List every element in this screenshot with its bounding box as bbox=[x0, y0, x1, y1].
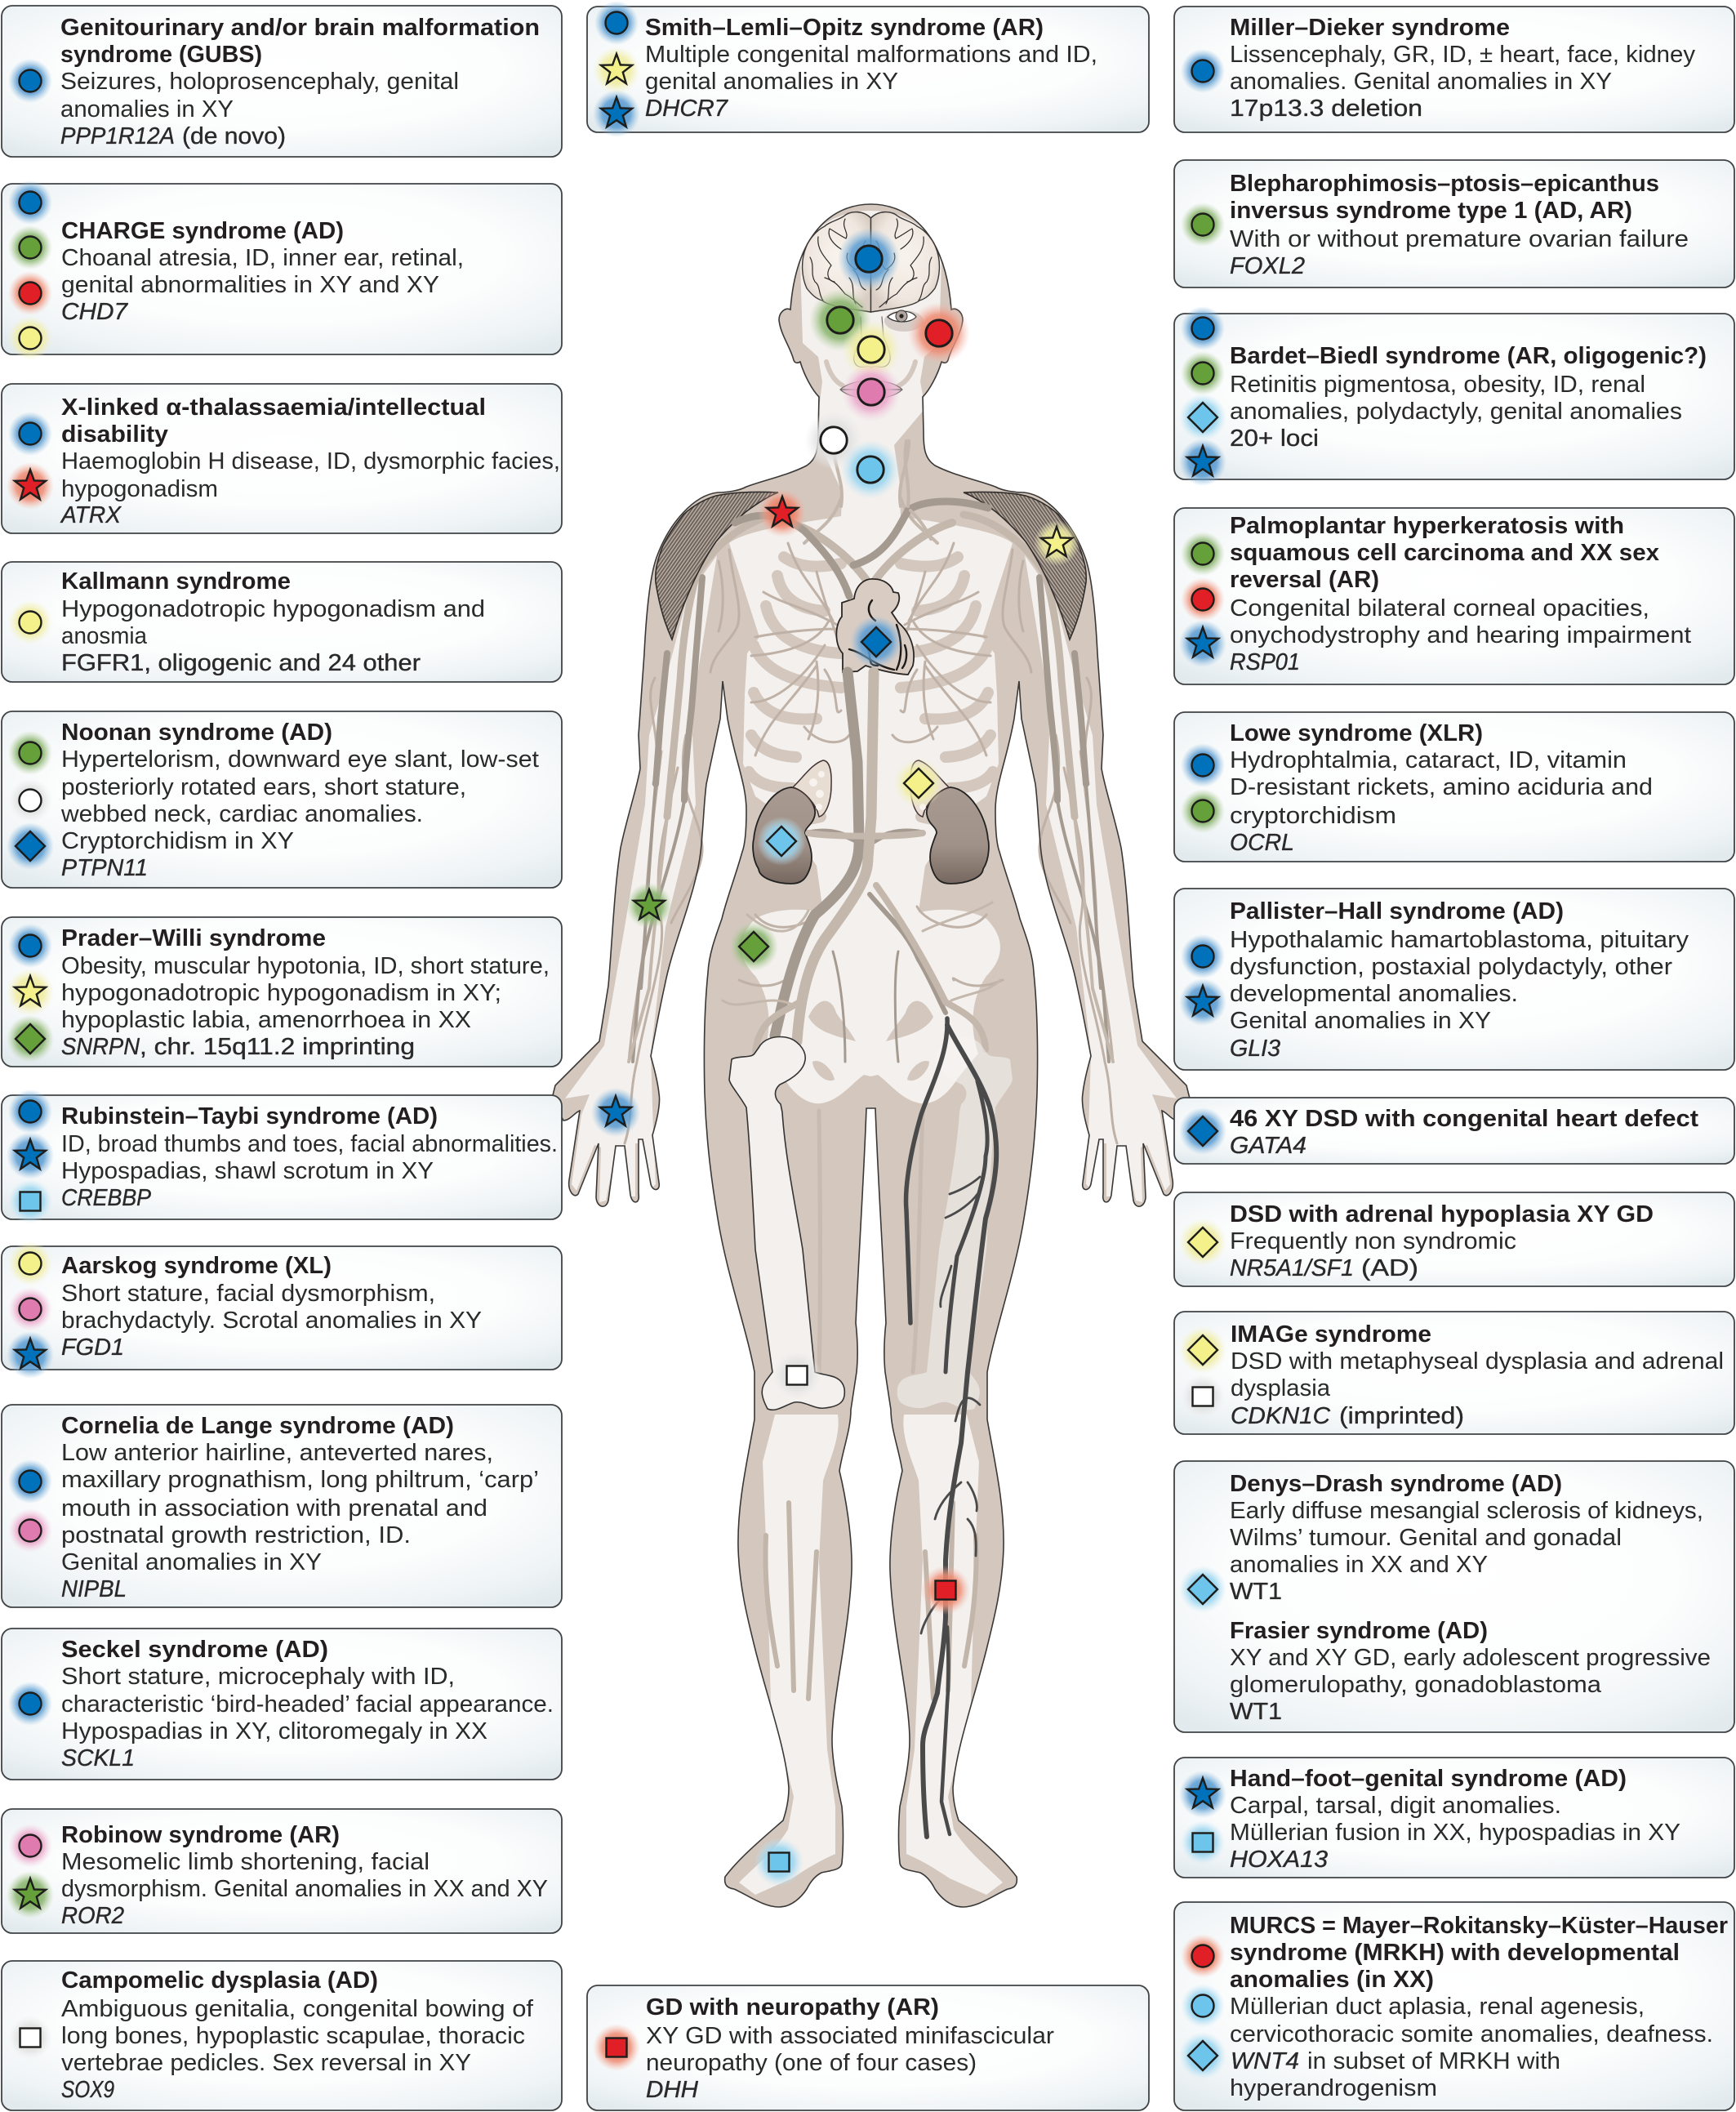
aorta and vena cava with iliac branches bbox=[723, 441, 1000, 1372]
icon: green circle bbox=[1181, 789, 1225, 833]
nose and mouth lines bbox=[840, 317, 902, 399]
icon: red circle bbox=[1181, 577, 1225, 622]
text block: 17p13.3 deletion bbox=[1230, 96, 1422, 122]
text block: Prader–Willi syndrome bbox=[61, 925, 326, 951]
right femur, translucent bbox=[897, 1037, 1013, 1410]
panel: IMAGe bbox=[1174, 1312, 1734, 1434]
panel: Blepharophimosis bbox=[1174, 160, 1734, 287]
body outline bbox=[552, 204, 1190, 1907]
text block: Noonan syndrome (AD) bbox=[61, 720, 332, 746]
text block: syndrome (GUBS) bbox=[60, 42, 262, 68]
icon: light blue diamond bbox=[1179, 394, 1226, 441]
text block: WT1 bbox=[1230, 1699, 1282, 1725]
icon: red star bbox=[7, 462, 54, 510]
icon: green diamond bbox=[7, 1015, 54, 1063]
icon: blue star bbox=[1179, 978, 1226, 1026]
text block: onychodystrophy and hearing impairment bbox=[1230, 622, 1691, 648]
marker: brain blue circle bbox=[838, 228, 900, 290]
text block: posteriorly rotated ears, short stature, bbox=[61, 774, 466, 800]
icon: blue circle bbox=[8, 412, 52, 456]
text block bbox=[61, 1253, 482, 1361]
panel box bbox=[1174, 1312, 1734, 1434]
text block: Lowe syndrome (XLR) bbox=[1230, 720, 1483, 746]
text block bbox=[1230, 171, 1689, 279]
text block: Mesomelic limb shortening, facial bbox=[61, 1849, 430, 1875]
text block: Hypertelorism, downward eye slant, low-set bbox=[61, 746, 539, 773]
text block: , chr. 15q11.2 imprinting bbox=[140, 1034, 415, 1060]
text block bbox=[61, 1103, 558, 1211]
text block bbox=[645, 15, 1097, 122]
panel: ATRX bbox=[2, 384, 562, 533]
text block: postnatal growth restriction, ID. bbox=[61, 1522, 411, 1548]
panel box bbox=[1174, 1192, 1734, 1286]
text block: disability bbox=[61, 421, 168, 448]
panel box bbox=[587, 7, 1149, 132]
text block bbox=[61, 1637, 554, 1771]
text block bbox=[60, 15, 540, 149]
icon: green circle bbox=[1181, 203, 1225, 247]
text block: OCRL bbox=[1230, 830, 1294, 856]
text block: Cryptorchidism in XY bbox=[61, 828, 294, 854]
text block bbox=[1230, 720, 1653, 856]
panel: Bardet-Biedl bbox=[1174, 306, 1734, 486]
text block: Hypospadias, shawl scrotum in XY bbox=[61, 1158, 434, 1184]
icon: blue star bbox=[7, 1132, 54, 1179]
marker: adrenal yellow diamond bbox=[894, 759, 943, 808]
text block: Genital anomalies in XY bbox=[61, 1549, 322, 1575]
text block: anomalies. Genital anomalies in XY bbox=[1230, 69, 1612, 95]
text block: DHH bbox=[646, 2077, 698, 2103]
icon: green circle bbox=[1181, 532, 1225, 576]
icon: blue circle bbox=[1181, 934, 1225, 978]
text block: neuropathy (one of four cases) bbox=[646, 2050, 977, 2076]
panel box bbox=[587, 1985, 1149, 2110]
panel: Robinow bbox=[2, 1809, 562, 1933]
text block: glomerulopathy, gonadoblastoma bbox=[1230, 1672, 1601, 1698]
text block: CHD7 bbox=[61, 299, 128, 325]
panel box bbox=[2, 562, 562, 682]
panel: GD with neuropathy bbox=[587, 1985, 1149, 2110]
text block: CREBBP bbox=[61, 1185, 151, 1211]
text block: Carpal, tarsal, digit anomalies. bbox=[1230, 1793, 1561, 1819]
text block: brachydactyly. Scrotal anomalies in XY bbox=[61, 1308, 482, 1334]
panel box bbox=[2, 1629, 562, 1780]
panel: Hand-foot-genital bbox=[1174, 1758, 1734, 1878]
text block: Choanal atresia, ID, inner ear, retinal, bbox=[61, 245, 464, 271]
text block: (imprinted) bbox=[1339, 1403, 1464, 1429]
panel box bbox=[2, 1095, 562, 1219]
panel: Rubinstein-Taybi bbox=[2, 1089, 562, 1223]
panel box bbox=[2, 6, 562, 157]
text block: ID, broad thumbs and toes, facial abnormalities. bbox=[61, 1131, 558, 1157]
text block: X-linked α-thalassaemia/intellectual bbox=[61, 394, 486, 421]
panel box bbox=[2, 1961, 562, 2110]
text block: SCKL1 bbox=[61, 1745, 135, 1771]
marker: nose yellow circle bbox=[842, 320, 901, 379]
text block: Kallmann syndrome bbox=[61, 568, 291, 595]
text block: mouth in association with prenatal and bbox=[61, 1495, 487, 1522]
icon: red square bbox=[593, 2024, 640, 2071]
text block: inversus syndrome type 1 (AD, AR) bbox=[1230, 198, 1632, 224]
text block bbox=[1230, 1471, 1711, 1725]
panel box bbox=[1174, 1902, 1734, 2110]
icon: yellow circle bbox=[8, 600, 52, 644]
panel box bbox=[1174, 314, 1734, 479]
text block: MURCS = Mayer–Rokitansky–Küster–Hauser bbox=[1230, 1913, 1728, 1939]
marker: hip green diamond bbox=[729, 922, 778, 971]
marker: forearm green star bbox=[626, 883, 672, 929]
text block bbox=[1230, 1913, 1728, 2101]
text block: HOXA13 bbox=[1230, 1847, 1328, 1873]
marker: shoulder yellow star bbox=[1034, 520, 1079, 566]
marker: knee white square bbox=[772, 1351, 821, 1400]
icon: red circle bbox=[8, 271, 52, 315]
text block: squamous cell carcinoma and XX sex bbox=[1230, 540, 1659, 566]
icon: blue circle bbox=[1181, 49, 1225, 93]
panel: GUBS bbox=[2, 6, 562, 157]
text block bbox=[1230, 15, 1696, 122]
text block: hyperandrogenism bbox=[1230, 2075, 1437, 2101]
text block: cryptorchidism bbox=[1230, 803, 1396, 829]
text block: PPP1R12A bbox=[60, 123, 175, 149]
icon: white square bbox=[1181, 1375, 1225, 1419]
panel: DSD with adrenal hypoplasia bbox=[1174, 1192, 1734, 1286]
icon: red circle bbox=[1181, 1934, 1225, 1978]
text block bbox=[61, 1413, 539, 1602]
text block: CHARGE syndrome (AD) bbox=[61, 218, 344, 244]
text block: hypogonadism bbox=[61, 476, 218, 502]
text block: characteristic ‘bird-headed’ facial appearance. bbox=[61, 1691, 554, 1718]
text block: Ambiguous genitalia, congenital bowing of bbox=[61, 1996, 533, 2022]
text block bbox=[60, 720, 539, 881]
sciatic nerve on right leg bbox=[906, 1018, 996, 1837]
marker: shin red square bbox=[921, 1566, 970, 1615]
text block: Aarskog syndrome (XL) bbox=[61, 1253, 332, 1279]
panel box bbox=[2, 1405, 562, 1607]
text block: Hypothalamic hamartoblastoma, pituitary bbox=[1230, 927, 1689, 953]
text block: dysfunction, postaxial polydactyly, other bbox=[1230, 954, 1673, 980]
icon: yellow diamond bbox=[1179, 1219, 1226, 1266]
panel: 46 XY DSD bbox=[1174, 1098, 1734, 1164]
text block: Obesity, muscular hypotonia, ID, short stature, bbox=[61, 953, 550, 979]
text block: developmental anomalies. bbox=[1230, 981, 1518, 1007]
text block bbox=[60, 394, 560, 528]
text block: Frequently non syndromic bbox=[1230, 1228, 1516, 1254]
icon: blue star bbox=[1179, 439, 1226, 486]
icon: white square bbox=[8, 2016, 52, 2060]
icon: green circle bbox=[8, 731, 52, 775]
panel: Aarskog bbox=[2, 1241, 562, 1379]
icon: blue circle bbox=[1181, 306, 1225, 350]
text block: Hand–foot–genital syndrome (AD) bbox=[1230, 1766, 1627, 1792]
text block: Congenital bilateral corneal opacities, bbox=[1230, 595, 1649, 622]
text block: Smith–Lemli–Opitz syndrome (AR) bbox=[645, 15, 1044, 41]
text block: Multiple congenital malformations and ID, bbox=[645, 42, 1097, 68]
text block: webbed neck, cardiac anomalies. bbox=[60, 801, 423, 827]
text block: Frasier syndrome (AD) bbox=[1230, 1618, 1488, 1644]
icon: yellow circle bbox=[8, 316, 52, 360]
icon: blue circle bbox=[1181, 743, 1225, 787]
text block: FGD1 bbox=[61, 1334, 124, 1361]
text block: anosmia bbox=[61, 623, 147, 649]
text block: 20+ loci bbox=[1230, 426, 1319, 452]
panel: Pallister-Hall bbox=[1174, 889, 1734, 1070]
text block: GD with neuropathy (AR) bbox=[646, 1994, 939, 2021]
icon: yellow circle bbox=[8, 1241, 52, 1285]
body markers bbox=[591, 228, 1079, 1887]
text block: WNT4 bbox=[1231, 2048, 1299, 2074]
text block: anomalies in XX and XY bbox=[1230, 1552, 1488, 1578]
panel box bbox=[2, 1246, 562, 1370]
text block: Seckel syndrome (AD) bbox=[61, 1637, 328, 1663]
text block bbox=[1230, 1201, 1654, 1281]
text block bbox=[1230, 1766, 1680, 1873]
panel: Noonan bbox=[2, 711, 562, 888]
icon: yellow diamond bbox=[1179, 1326, 1226, 1374]
icon: white circle bbox=[8, 778, 52, 822]
anatomical human figure bbox=[552, 204, 1190, 1907]
icon: pink circle bbox=[8, 1508, 52, 1553]
text block: NIPBL bbox=[61, 1576, 127, 1602]
text block bbox=[61, 568, 485, 676]
marker: shoulder red star bbox=[758, 488, 807, 537]
panel: Seckel bbox=[2, 1629, 562, 1780]
text block: Haemoglobin H disease, ID, dysmorphic facies, bbox=[61, 448, 560, 475]
text block: DHCR7 bbox=[645, 96, 728, 122]
text block: Retinitis pigmentosa, obesity, ID, renal bbox=[1230, 372, 1645, 398]
text block: FOXL2 bbox=[1230, 253, 1305, 279]
text block: Lissencephaly, GR, ID, ± heart, face, kidney bbox=[1230, 42, 1696, 68]
marker: kidney light blue diamond bbox=[757, 817, 806, 866]
text block: SNRPN bbox=[61, 1034, 140, 1060]
text block bbox=[1231, 1321, 1724, 1429]
panel: Cornelia de Lange bbox=[2, 1405, 562, 1607]
text block: genital anomalies in XY bbox=[645, 69, 898, 95]
icon: light blue circle bbox=[1181, 1984, 1225, 2028]
text block: dysplasia bbox=[1231, 1375, 1330, 1401]
panel box bbox=[1174, 1461, 1734, 1732]
panel box bbox=[1174, 508, 1734, 684]
text block: WT1 bbox=[1230, 1579, 1282, 1605]
text block: Short stature, facial dysmorphism, bbox=[61, 1281, 435, 1307]
text block: anomalies (in XX) bbox=[1230, 1967, 1434, 1993]
icon: light blue diamond bbox=[1179, 2032, 1226, 2079]
icon: blue star bbox=[7, 1331, 54, 1379]
marker: hand blue star bbox=[591, 1088, 640, 1137]
text block: With or without premature ovarian failure bbox=[1230, 226, 1689, 252]
text block bbox=[1230, 1106, 1699, 1159]
text block: Seizures, holoprosencephaly, genital bbox=[60, 69, 459, 95]
text block: Pallister–Hall syndrome (AD) bbox=[1230, 898, 1564, 925]
text block: Early diffuse mesangial sclerosis of kidneys, bbox=[1230, 1498, 1703, 1524]
text block: FGFR1, oligogenic and 24 other bbox=[61, 650, 421, 676]
text block bbox=[1230, 898, 1689, 1062]
marker: mouth pink circle bbox=[842, 363, 901, 421]
text block: genital abnormalities in XY and XY bbox=[61, 272, 439, 298]
icon: blue diamond bbox=[7, 822, 54, 870]
text block: Müllerian duct aplasia, renal agenesis, bbox=[1230, 1994, 1645, 2020]
panel box bbox=[1174, 889, 1734, 1070]
icon: pink circle bbox=[8, 1287, 52, 1331]
text block: XY and XY GD, early adolescent progressive bbox=[1230, 1645, 1711, 1671]
icon: blue star bbox=[593, 90, 640, 137]
text block bbox=[61, 1822, 548, 1929]
text block: DSD with adrenal hypoplasia XY GD bbox=[1230, 1201, 1654, 1228]
right eye bbox=[884, 310, 924, 332]
marker: heart blue diamond bbox=[850, 616, 902, 668]
text block: Hypogonadotropic hypogonadism and bbox=[61, 596, 485, 622]
text block: 46 XY DSD with congenital heart defect bbox=[1230, 1106, 1699, 1132]
panel: Prader-Willi bbox=[2, 917, 562, 1067]
text block: Wilms’ tumour. Genital and gonadal bbox=[1230, 1525, 1622, 1551]
text block: GLI3 bbox=[1230, 1036, 1280, 1062]
panel: Kallmann bbox=[2, 562, 562, 682]
text block: anomalies, polydactyly, genital anomalies bbox=[1230, 399, 1682, 425]
text block: Short stature, microcephaly with ID, bbox=[61, 1664, 455, 1690]
text block: D-resistant rickets, amino aciduria and bbox=[1230, 774, 1653, 800]
text block: Denys–Drash syndrome (AD) bbox=[1230, 1471, 1562, 1497]
icon: blue circle bbox=[8, 1459, 52, 1504]
left femur bone bbox=[729, 1037, 844, 1410]
panel: Lowe bbox=[1174, 712, 1734, 862]
text block: Palmoplantar hyperkeratosis with bbox=[1230, 513, 1624, 539]
icon: light blue square bbox=[8, 1179, 52, 1223]
icon: blue star bbox=[1179, 620, 1226, 667]
text block: vertebrae pedicles. Sex reversal in XY bbox=[61, 2050, 471, 2076]
text block: hypogonadotropic hypogonadism in XY; bbox=[61, 980, 501, 1006]
face and neck light area bbox=[800, 211, 941, 490]
text block: SOX9 bbox=[61, 2077, 114, 2103]
icon: pink circle bbox=[8, 1824, 52, 1868]
text block: Hydrophtalmia, cataract, ID, vitamin bbox=[1230, 747, 1627, 773]
panel box bbox=[2, 917, 562, 1067]
text block: hypoplastic labia, amenorrhoea in XX bbox=[61, 1007, 471, 1033]
panel: Denys-Drash and Frasier bbox=[1174, 1461, 1734, 1732]
panel box bbox=[1174, 1758, 1734, 1878]
text block: Hypospadias in XY, clitoromegaly in XX bbox=[61, 1718, 487, 1744]
text block: Low anterior hairline, anteverted nares, bbox=[61, 1440, 493, 1466]
icon: blue circle bbox=[594, 1, 639, 45]
panel box bbox=[1174, 160, 1734, 287]
text block: IMAGe syndrome bbox=[1231, 1321, 1431, 1348]
icon: blue circle bbox=[8, 180, 52, 225]
panel box bbox=[2, 384, 562, 533]
marker: foot light blue square bbox=[754, 1838, 803, 1887]
text block: ROR2 bbox=[61, 1903, 124, 1929]
text block: anomalies in XY bbox=[60, 96, 234, 123]
panel box bbox=[2, 711, 562, 888]
text block: CDKN1C bbox=[1231, 1403, 1330, 1429]
brain bbox=[803, 212, 939, 312]
text block: (AD) bbox=[1361, 1255, 1418, 1281]
text block: ATRX bbox=[60, 502, 122, 528]
text block: DSD with metaphyseal dysplasia and adrenal bbox=[1231, 1348, 1724, 1375]
body silhouette fill bbox=[552, 204, 1190, 1907]
icon: blue circle bbox=[8, 924, 52, 968]
icon: light blue diamond bbox=[1179, 1566, 1226, 1613]
text block: (de novo) bbox=[182, 123, 286, 149]
marker: neck white circle bbox=[804, 411, 863, 470]
panel: CHARGE bbox=[2, 180, 562, 360]
text block bbox=[61, 1967, 533, 2103]
text block: PTPN11 bbox=[61, 855, 148, 881]
icon: yellow star bbox=[593, 47, 640, 94]
icon: blue circle bbox=[8, 1682, 52, 1726]
text block: Campomelic dysplasia (AD) bbox=[61, 1967, 378, 1994]
text block bbox=[1230, 343, 1707, 452]
panel box bbox=[2, 184, 562, 354]
text block: NR5A1/SF1 bbox=[1230, 1255, 1354, 1281]
text block: in subset of MRKH with bbox=[1307, 2048, 1560, 2074]
icon: blue star bbox=[1179, 1771, 1226, 1818]
panel: MURCS bbox=[1174, 1902, 1734, 2110]
skeleton, vessels and organs bbox=[565, 362, 1177, 1895]
text block bbox=[61, 925, 550, 1060]
heart bbox=[836, 579, 914, 675]
text block: XY GD with associated minifascicular bbox=[646, 2023, 1055, 2049]
marker: choanal green circle bbox=[809, 289, 871, 351]
text block: dysmorphism. Genital anomalies in XX and XY bbox=[61, 1876, 548, 1902]
panel box bbox=[1174, 1098, 1734, 1164]
panel: Campomelic dysplasia bbox=[2, 1961, 562, 2110]
text block bbox=[1230, 513, 1691, 675]
text block: long bones, hypoplastic scapulae, thoracic bbox=[61, 2023, 525, 2049]
panel: Miller-Dieker bbox=[1174, 7, 1734, 132]
text block: Robinow syndrome (AR) bbox=[61, 1822, 340, 1848]
text block: Blepharophimosis–ptosis–epicanthus bbox=[1230, 171, 1659, 197]
text block bbox=[646, 1994, 1055, 2103]
text block: RSP01 bbox=[1230, 649, 1300, 675]
panel: Smith-Lemli-Opitz bbox=[587, 1, 1149, 137]
panel box bbox=[1174, 712, 1734, 862]
text block: cervicothoracic somite anomalies, deafness. bbox=[1230, 2021, 1713, 2047]
icon: blue circle bbox=[8, 59, 52, 103]
text block: Rubinstein–Taybi syndrome (AD) bbox=[61, 1103, 438, 1130]
text block: Genital anomalies in XY bbox=[1230, 1008, 1491, 1034]
marker: throat light blue circle bbox=[841, 440, 900, 499]
icon: yellow star bbox=[7, 969, 54, 1016]
text block: maxillary prognathism, long philtrum, ‘carp’ bbox=[61, 1467, 539, 1493]
icon: green circle bbox=[8, 225, 52, 270]
icon: blue circle bbox=[8, 1089, 52, 1134]
text block: syndrome (MRKH) with developmental bbox=[1230, 1940, 1680, 1966]
icon: green circle bbox=[1181, 351, 1225, 395]
text block: Miller–Dieker syndrome bbox=[1230, 15, 1510, 41]
text block: reversal (AR) bbox=[1230, 567, 1379, 593]
text block: Bardet–Biedl syndrome (AR, oligogenic?) bbox=[1230, 343, 1707, 369]
text block: GATA4 bbox=[1230, 1133, 1306, 1159]
panel: Palmoplantar hyperkeratosis bbox=[1174, 508, 1734, 684]
icon: blue diamond bbox=[1179, 1107, 1226, 1155]
text block: Müllerian fusion in XX, hypospadias in XY bbox=[1230, 1820, 1680, 1846]
text block bbox=[61, 218, 464, 325]
marker: ear red circle bbox=[908, 302, 970, 364]
text block: Genitourinary and/or brain malformation bbox=[60, 15, 540, 41]
icon: light blue square bbox=[1181, 1820, 1225, 1865]
panel box bbox=[1174, 7, 1734, 132]
icon: green star bbox=[7, 1871, 54, 1918]
text block: Cornelia de Lange syndrome (AD) bbox=[61, 1413, 454, 1439]
panel box bbox=[2, 1809, 562, 1933]
